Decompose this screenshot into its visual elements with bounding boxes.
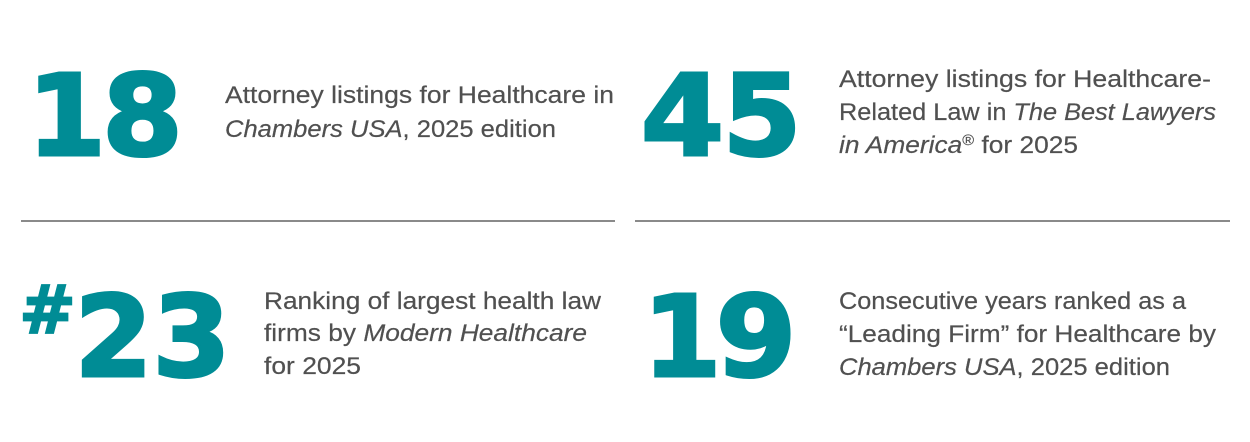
description: Best Lawyers listings: ®	[962, 132, 974, 149]
number: 18	[27, 51, 183, 182]
description: Best Lawyers listings	[839, 66, 1216, 159]
number: 19: 1	[643, 272, 721, 403]
description: Leading Firm years: Consecutive years ranked as a	[839, 288, 1186, 315]
number: 18: 8	[102, 51, 183, 182]
number: #23: 2	[74, 273, 153, 403]
stat: 19 consecutive years	[643, 272, 1217, 403]
description: Leading Firm years	[839, 288, 1217, 381]
stat: 18 attorney listings	[27, 51, 614, 182]
number: #23: #	[19, 270, 76, 349]
number: #23: 3	[152, 273, 231, 403]
description: Modern Healthcare ranking	[264, 288, 601, 380]
number: #23	[19, 270, 231, 403]
description: Modern Healthcare ranking: for 2025	[264, 353, 361, 380]
description: Leading Firm years: “Leading Firm” for Healthcare by	[839, 321, 1217, 348]
divider right	[635, 220, 1230, 222]
description: Best Lawyers listings: for 2025	[974, 132, 1078, 159]
description: Best Lawyers listings: Related Law in The Best Lawyers	[839, 99, 1216, 126]
number: 45: 5	[723, 51, 801, 182]
divider left	[21, 220, 615, 222]
number: 19	[643, 272, 796, 403]
description: Modern Healthcare ranking: firms by Modern Healthcare	[264, 320, 587, 347]
stat: 45 attorney listings	[641, 51, 1216, 182]
number: 18: 1	[27, 51, 106, 182]
description: Chambers USA listings: Chambers USA , 2025 edition	[225, 116, 556, 143]
description: Chambers USA listings	[225, 82, 614, 143]
description: Chambers USA listings: Attorney listings for Healthcare in	[225, 82, 614, 109]
description: Best Lawyers listings: Attorney listings for Healthcare-	[839, 66, 1211, 93]
description: Leading Firm years: Chambers USA , 2025 edition	[839, 354, 1170, 381]
stat: #23 ranking	[19, 270, 601, 403]
description: Best Lawyers listings: in America	[839, 132, 962, 159]
number: 45	[641, 51, 801, 182]
number: 19: 9	[716, 272, 796, 403]
description: Modern Healthcare ranking: Ranking of largest health law	[264, 288, 601, 315]
number: 45: 4	[641, 52, 724, 182]
